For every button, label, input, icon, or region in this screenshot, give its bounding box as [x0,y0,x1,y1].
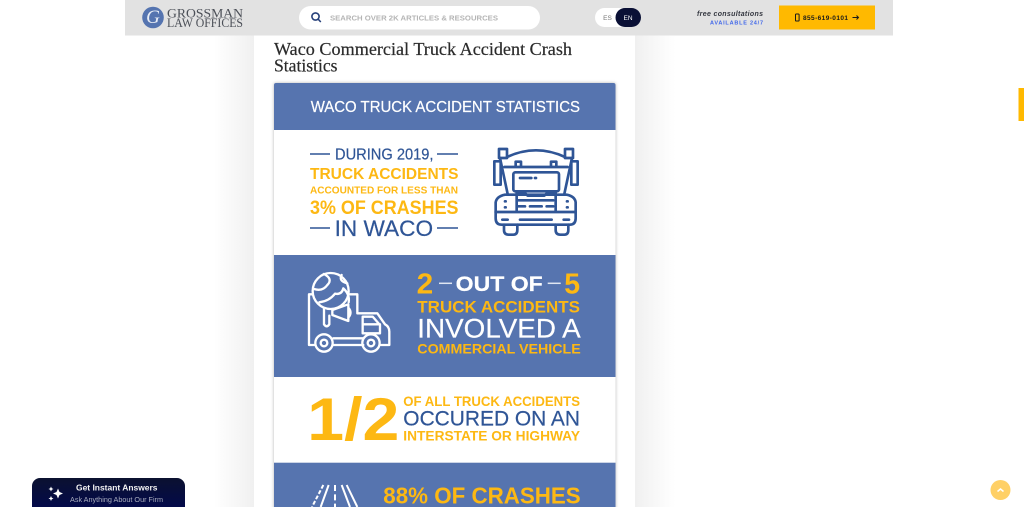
header bar [125,0,893,36]
text block: interstate or highway: OF ALL TRUCK ACCIDENTS [403,393,580,409]
article heading: Waco Commercial Truck Accident Crash [274,39,572,59]
text block: 2 out of 5 truck accidents: TRUCK ACCIDENTS [417,297,580,316]
text block: less than 3% of crashes: TRUCK ACCIDENTS [310,166,458,183]
panel: title band [274,83,616,130]
chat widget [32,478,185,507]
big fraction 1/2: 1/2 [307,386,399,453]
logo: Grossman Law Offices: GROSSMAN [167,6,244,20]
article heading: Statistics [274,56,338,76]
panel: one half on interstate or highway [307,386,580,453]
panel: 88% of crashes [274,463,616,507]
logo: Grossman Law Offices: G [146,7,160,28]
free consultations note: AVAILABLE 24/7 [710,20,763,26]
text block: interstate or highway [403,393,580,443]
page column with side shadows [214,35,675,507]
side tab [1018,88,1024,121]
chat text: Ask Anything About Our Firm [70,495,163,504]
icon: road [312,485,357,507]
icon: truck carrying melting globe [309,273,389,352]
language toggle [595,8,641,27]
free consultations note [697,11,763,26]
phone button: 855-619-0101 [803,15,848,22]
text block: less than 3% of crashes: 3% OF CRASHES [310,197,458,219]
scroll to top button [990,480,1010,500]
panel: title band: WACO TRUCK ACCIDENT STATISTICS [311,99,580,116]
text block: 2 out of 5 truck accidents [417,268,581,356]
text block: less than 3% of crashes [310,146,458,241]
article heading [274,39,572,76]
text block: 2 out of 5 truck accidents: COMMERCIAL VEHICLE [417,340,581,356]
text block: 2 out of 5 truck accidents: INVOLVED A [417,314,581,344]
text block: interstate or highway: INTERSTATE OR HIGHWAY [403,428,580,443]
phone button [779,6,875,30]
infographic card [274,83,616,507]
search box: SEARCH OVER 2K ARTICLES & RESOURCES [330,15,498,22]
text block: less than 3% of crashes: DURING 2019, [335,146,434,163]
text block: 2 out of 5 truck accidents: 5 [564,268,580,300]
icon: truck front view [494,149,578,235]
panel: 2 out of 5 [274,255,616,377]
text block: less than 3% of crashes: ACCOUNTED FOR LESS THAN [310,185,458,196]
text block: 2 out of 5 truck accidents: 2 [417,268,433,300]
search box [299,6,540,30]
text block: 2 out of 5 truck accidents: OUT OF [456,272,543,296]
chat text [70,484,163,504]
panel: during 2019 [310,146,578,241]
language toggle: ES [603,15,612,22]
language toggle: EN [623,15,633,22]
logo: Grossman Law Offices [142,6,244,30]
text block: less than 3% of crashes: IN WACO [335,216,433,241]
text block: interstate or highway: OCCURED ON AN [403,408,580,431]
chat text: Get Instant Answers [76,484,158,492]
icon: sparkles [48,486,63,501]
free consultations note: free consultations [697,11,763,18]
logo: Grossman Law Offices: LAW OFFICES [167,16,243,30]
